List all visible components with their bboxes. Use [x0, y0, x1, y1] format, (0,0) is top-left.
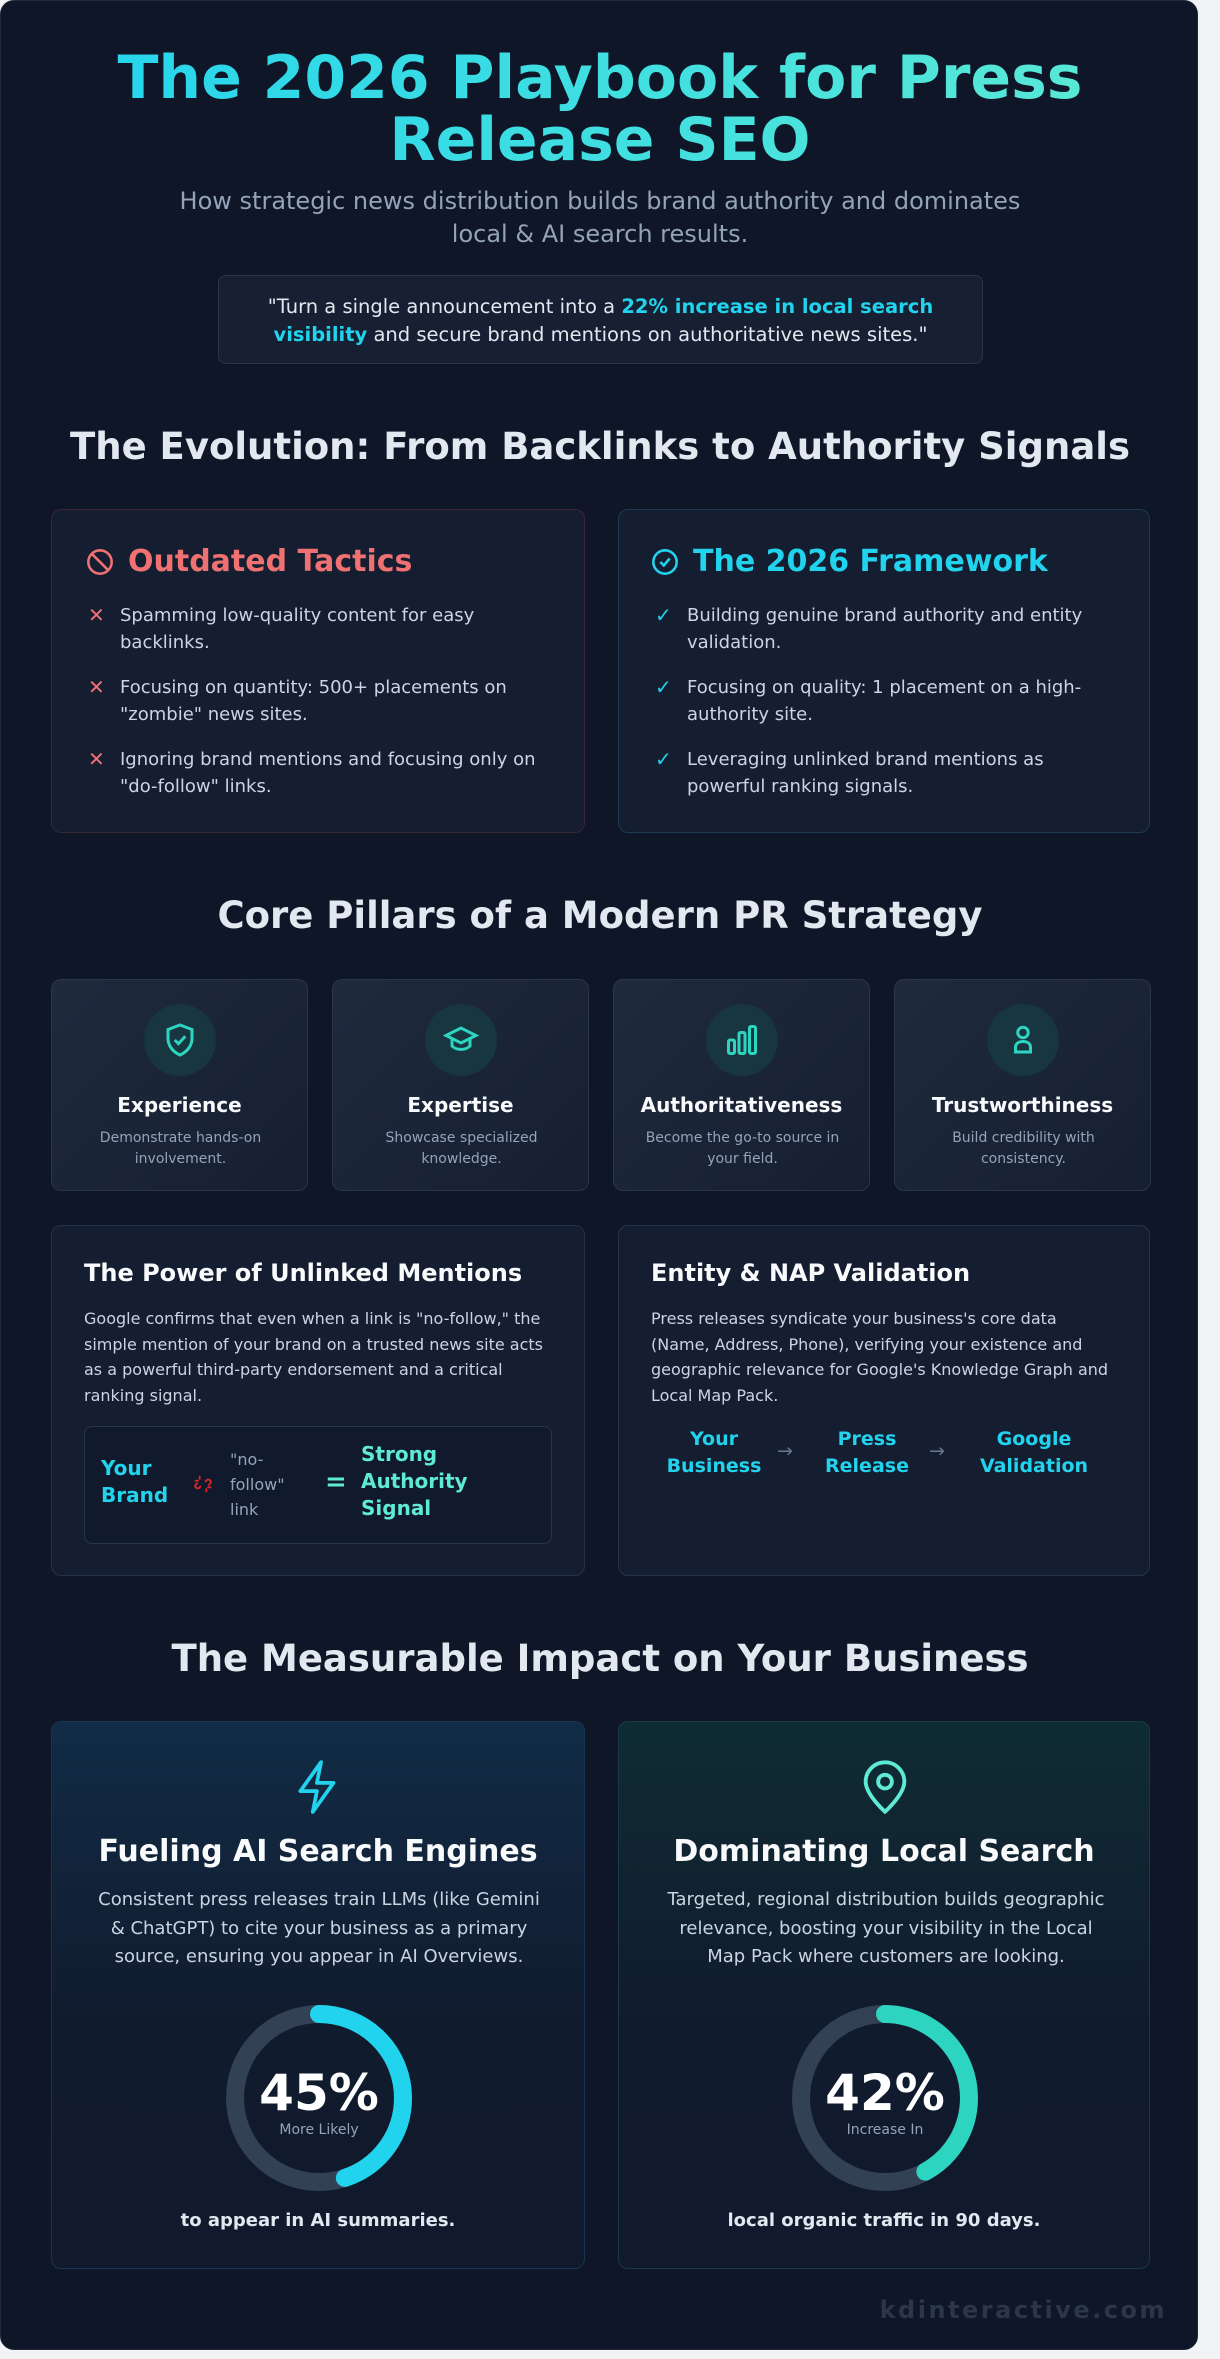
flow diagram: Validation: [980, 1455, 1088, 1477]
equation box: Signal: [361, 1496, 431, 1520]
icon: person: [987, 1004, 1059, 1076]
pillar: experience: Demonstrate hands-on involvement.: [100, 1130, 261, 1167]
equation box: Strong: [361, 1442, 437, 1466]
icon: map pin: [864, 1760, 906, 1814]
equation box: Brand: [101, 1483, 168, 1507]
pillar: trustworthiness: [894, 979, 1151, 1191]
panel: 2026 framework: Leveraging unlinked brand mentions as powerful ranking signals.: [687, 749, 1044, 797]
equation box: =: [325, 1467, 347, 1497]
title: [1, 47, 1199, 171]
panel: 2026 framework: [618, 509, 1150, 833]
subtitle: How strategic news distribution builds brand authority and dominates: [180, 187, 1020, 215]
pillar: authoritativeness: [613, 979, 870, 1191]
heading: framework: The 2026 Framework: [693, 544, 1048, 579]
subtitle: local & AI search results.: [452, 220, 748, 248]
icon: bar chart: [706, 1004, 778, 1076]
pillar: experience: Experience: [117, 1093, 242, 1117]
panel: outdated tactics: ✕: [88, 675, 105, 699]
panel: entity NAP: [618, 1225, 1150, 1576]
pillar: expertise: Showcase specialized knowledge.: [386, 1130, 538, 1167]
panel: 2026 framework: Focusing on quality: 1 placement on a high-authority site.: [687, 677, 1081, 725]
panel: unlinked mentions: [51, 1225, 585, 1576]
panel: local search: [618, 1721, 1150, 2269]
flow diagram: Google: [997, 1428, 1071, 1450]
panel: local search: Dominating Local Search: [673, 1834, 1095, 1869]
equation box: "no-: [230, 1450, 263, 1469]
pillar: authoritativeness: Become the go-to source in your field.: [646, 1130, 839, 1167]
equation box: link: [230, 1500, 258, 1519]
text: Press releases syndicate your business's core data: [651, 1309, 1057, 1328]
flow diagram: →: [777, 1440, 793, 1462]
flow diagram: Business: [667, 1455, 761, 1477]
pillar: trustworthiness: Trustworthiness: [932, 1093, 1113, 1117]
panel: 2026 framework: ✓: [655, 675, 672, 699]
list: outdated: [88, 603, 536, 797]
pillar: authoritativeness: Authoritativeness: [641, 1093, 842, 1117]
flow diagram: →: [929, 1440, 945, 1462]
list: framework: [655, 603, 1082, 797]
donut chart 42%: 42%: [825, 2064, 945, 2122]
heading: evolution: The Evolution: From Backlinks to Authority Signals: [70, 425, 1130, 468]
donut chart 42%: Increase In: [847, 2122, 923, 2138]
donut chart 45%: More Likely: [279, 2122, 359, 2138]
heading: outdated tactics: Outdated Tactics: [128, 544, 412, 579]
panel: outdated tactics: [51, 509, 585, 833]
icon: graduation cap: [425, 1004, 497, 1076]
heading: Entity & NAP Validation: [651, 1259, 970, 1287]
panel: 2026 framework: ✓: [655, 603, 672, 627]
heading: The Power of Unlinked Mentions: [84, 1259, 522, 1287]
panel: outdated tactics: Ignoring brand mentions and focusing only on "do-follow" links.: [120, 749, 536, 797]
panel: AI search: Consistent press releases train LLMs (like Gemini & ChatGPT) to cite your business as a primary source, ensuring you appear in AI Overviews.: [98, 1889, 540, 1967]
panel: 2026 framework: ✓: [655, 747, 672, 771]
pillar: trustworthiness: Build credibility with consistency.: [952, 1130, 1095, 1167]
heading: measurable impact: The Measurable Impact on Your Business: [171, 1637, 1029, 1680]
equation box: follow": [230, 1475, 285, 1494]
pillar: experience: [51, 979, 308, 1191]
text: (Name, Address, Phone), verifying your existence and geographic relevance for Google's Knowledge Graph and Local Map Pack.: [651, 1334, 1108, 1404]
flow diagram: Press: [838, 1428, 896, 1450]
panel: outdated tactics: ✕: [88, 603, 105, 627]
panel: AI search: to appear in AI summaries.: [181, 2210, 455, 2231]
heading: core pillars: Core Pillars of a Modern PR Strategy: [217, 894, 983, 937]
flow diagram: [667, 1428, 1088, 1477]
subtitle: [180, 187, 1020, 248]
equation box: Your: [101, 1456, 152, 1480]
flow diagram: Release: [825, 1455, 909, 1477]
panel: 2026 framework: Building genuine brand authority and entity validation.: [687, 605, 1082, 653]
donut chart 45%: 45%: [259, 2064, 379, 2122]
panel: outdated tactics: ✕: [88, 747, 105, 771]
text: Google confirms that even when a link is "no-follow," the simple mention of your brand on a trusted news site acts as a powerful third-party endorsement and a critical ranking signal.: [84, 1309, 543, 1404]
icon: shield: [144, 1004, 216, 1076]
panel: AI search: Fueling AI Search Engines: [98, 1834, 538, 1869]
pillar: expertise: [332, 979, 589, 1191]
equation box: [84, 1426, 552, 1544]
icon: lightning: [298, 1760, 336, 1814]
donut chart 45%: [226, 2005, 412, 2191]
footer brand: kdinteractive.com: [880, 2296, 1167, 2324]
panel: AI search: [51, 1721, 585, 2269]
equation box: Authority: [361, 1469, 468, 1493]
flow diagram: Your: [690, 1428, 738, 1450]
title: Release SEO: [389, 105, 811, 175]
pillar: expertise: Expertise: [407, 1093, 514, 1117]
panel: local search: local organic traffic in 90 days.: [728, 2210, 1040, 2231]
panel: outdated tactics: Spamming low-quality content for easy backlinks.: [120, 605, 474, 653]
panel: outdated tactics: Focusing on quantity: 500+ placements on "zombie" news sites.: [120, 677, 507, 725]
quote callout: "Turn a single announcement into a 22% increase in local search visibility and secure brand mentions on authoritative news sites.": [268, 295, 933, 346]
icon: broken link: [194, 1476, 212, 1492]
title: The 2026 Playbook for Press: [117, 43, 1083, 113]
donut chart 42%: [792, 2005, 978, 2191]
panel: local search: Targeted, regional distribution builds geographic relevance, boosting your visibility in the Local Map Pack where customers are looking.: [667, 1889, 1105, 1967]
quote callout: [218, 275, 983, 364]
